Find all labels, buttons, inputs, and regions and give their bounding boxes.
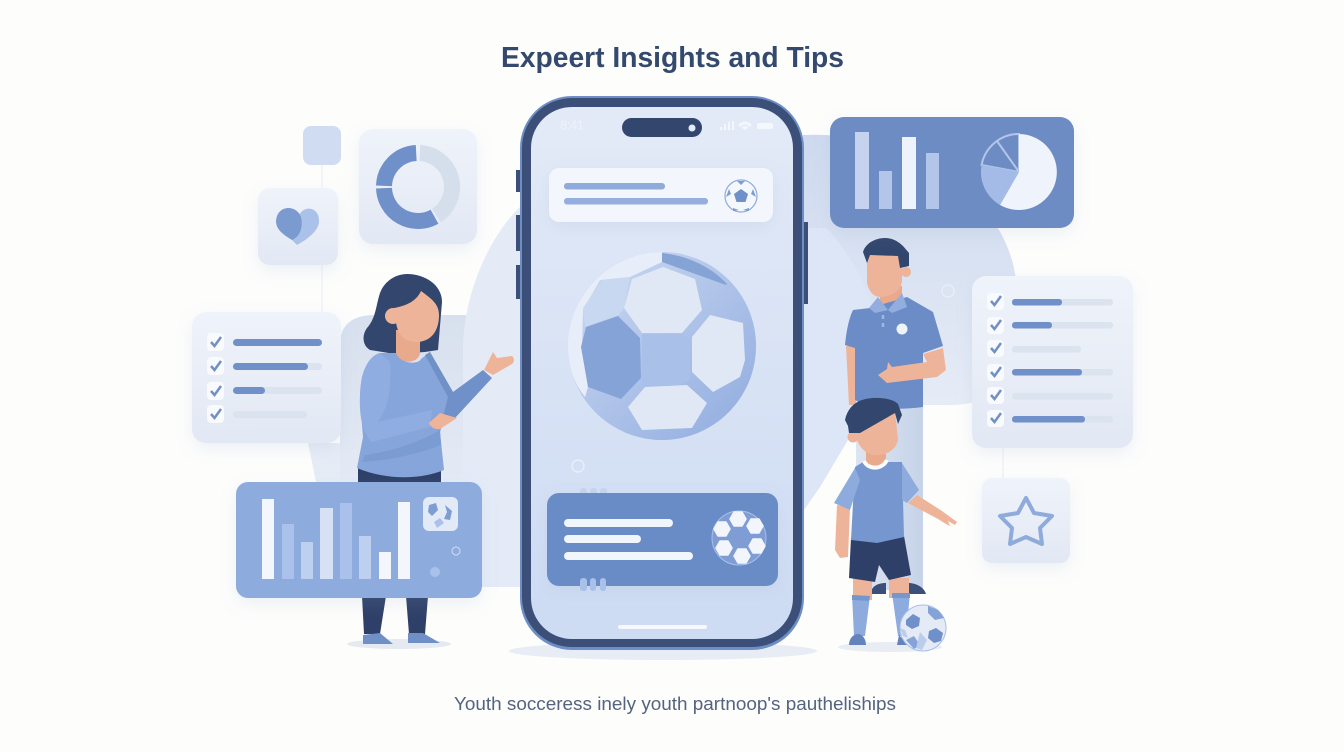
bottom card	[547, 488, 778, 591]
shirt badge	[896, 324, 908, 334]
top card	[549, 168, 773, 222]
caption: Youth socceress inely youth partnoop's pautheliships	[454, 694, 896, 714]
left dark pentagon	[581, 316, 641, 399]
phone	[516, 96, 808, 650]
ear	[901, 267, 911, 277]
panel: donut chart card	[359, 129, 477, 244]
waist	[358, 468, 441, 486]
dynamic island	[622, 118, 702, 137]
shoes	[363, 633, 440, 644]
title: Expeert Insights and Tips	[501, 42, 844, 74]
soccer ball	[900, 605, 946, 651]
panel: star card	[982, 478, 1070, 563]
progress bars	[1012, 299, 1113, 422]
top white pentagon	[624, 267, 702, 333]
boy shoes	[849, 634, 908, 645]
hair back	[364, 274, 442, 354]
panel: top-right chart card	[830, 117, 1074, 228]
figure: boy	[834, 398, 957, 652]
neckline	[864, 460, 887, 468]
neck	[866, 450, 886, 466]
icon: ball badge	[423, 497, 458, 531]
bar chart	[262, 499, 410, 579]
hair	[845, 398, 902, 433]
ball highlight	[568, 252, 662, 397]
top-right dark panel	[662, 253, 727, 285]
icon: heart	[276, 208, 319, 245]
sweater lower band	[362, 430, 441, 462]
donut chart	[384, 153, 452, 221]
phone screen	[531, 107, 793, 639]
icon: star	[1000, 498, 1052, 544]
checklist rows	[207, 333, 322, 423]
t-shirt	[851, 462, 904, 543]
centre panel	[642, 334, 690, 385]
upper hand	[484, 352, 514, 375]
ear	[848, 432, 858, 442]
right arm	[443, 370, 492, 418]
lower tabs	[580, 578, 606, 591]
left arm	[846, 346, 856, 405]
icon: soccer ball	[712, 511, 766, 565]
upper-left panel	[583, 277, 630, 327]
right white pentagon	[692, 315, 745, 392]
shorts	[849, 536, 911, 582]
sweater	[357, 352, 453, 477]
socks	[852, 593, 910, 636]
panel: heart card	[258, 188, 338, 265]
text lines	[564, 519, 673, 527]
side buttons	[516, 170, 808, 304]
status time: 8:41	[560, 118, 584, 132]
card tabs	[580, 488, 607, 499]
shoes	[871, 583, 926, 594]
big soccer ball	[568, 252, 756, 440]
collar	[869, 293, 907, 313]
face	[867, 255, 902, 297]
forearm	[878, 348, 946, 383]
shirt buttons	[882, 315, 884, 327]
hair	[863, 238, 909, 268]
panel: left checklist	[192, 312, 341, 443]
bar chart	[855, 132, 939, 209]
bottom white pentagon	[628, 385, 707, 430]
legs	[853, 578, 909, 600]
face	[857, 411, 898, 455]
ground shadow	[838, 642, 942, 652]
ear	[385, 308, 401, 324]
sweater side strip	[425, 352, 453, 397]
icon: small blue square	[303, 126, 341, 165]
icon: small soccer ball	[725, 180, 757, 212]
left sleeve	[360, 353, 432, 442]
sleeves	[834, 463, 919, 510]
home indicator	[618, 625, 707, 629]
checkboxes	[987, 293, 1004, 427]
small outline circle	[572, 460, 584, 472]
pie chart	[981, 134, 1057, 210]
lower hand	[429, 413, 457, 429]
polo shirt	[845, 297, 943, 409]
sock bands	[852, 593, 910, 601]
small outline circle	[942, 285, 954, 297]
neck	[880, 286, 902, 310]
shadow	[347, 639, 451, 649]
figure: woman	[347, 274, 514, 649]
neck	[396, 330, 420, 362]
status icons	[720, 121, 773, 130]
phone body	[520, 96, 804, 650]
background blobs	[308, 135, 1016, 590]
phone shadow	[509, 642, 817, 660]
panel: bottom-left bar chart	[236, 482, 482, 598]
face	[394, 291, 439, 342]
panel: right checklist	[972, 276, 1133, 448]
figure: man	[845, 238, 946, 594]
legs	[362, 596, 428, 634]
arms	[835, 495, 957, 558]
